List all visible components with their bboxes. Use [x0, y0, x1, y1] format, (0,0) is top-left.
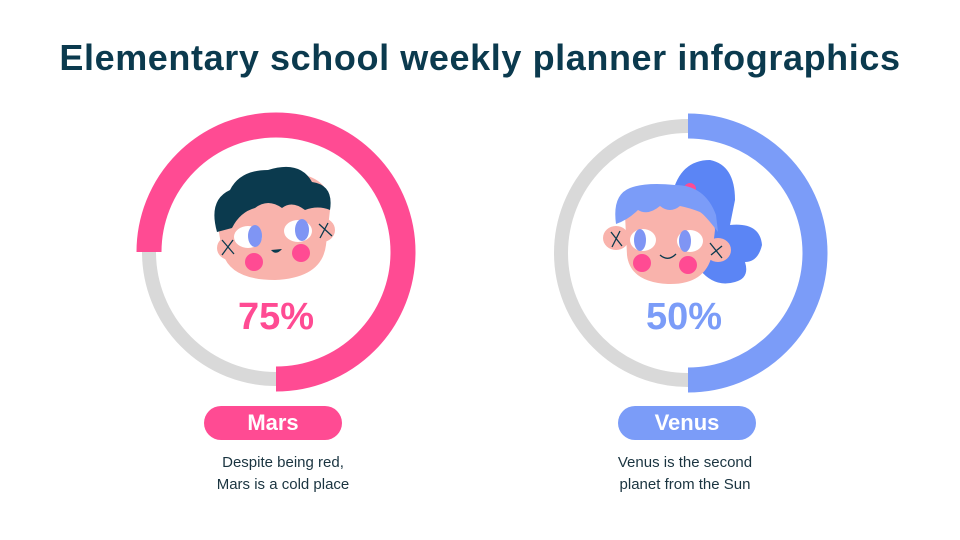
pill: mars: [204, 406, 342, 440]
pill: venus: Venus: [655, 410, 719, 435]
percent: mars: 75%: [238, 296, 314, 338]
percent: venus: 50%: [646, 296, 722, 338]
text: venus description: [618, 454, 752, 493]
icon: boy face: [214, 167, 335, 280]
text: mars description: [217, 454, 349, 493]
ring: mars: [149, 125, 403, 379]
pill: mars: Mars: [247, 410, 299, 435]
text: mars description: Mars is a cold place: [217, 476, 349, 493]
text: venus description: Venus is the second: [618, 454, 752, 471]
pill: venus: [618, 406, 756, 440]
icon: girl face: [603, 160, 762, 284]
title: Elementary school weekly planner infographics: [59, 37, 901, 78]
text: mars description: Despite being red,: [222, 454, 344, 471]
ring: venus: [561, 126, 815, 380]
text: venus description: planet from the Sun: [620, 476, 750, 493]
